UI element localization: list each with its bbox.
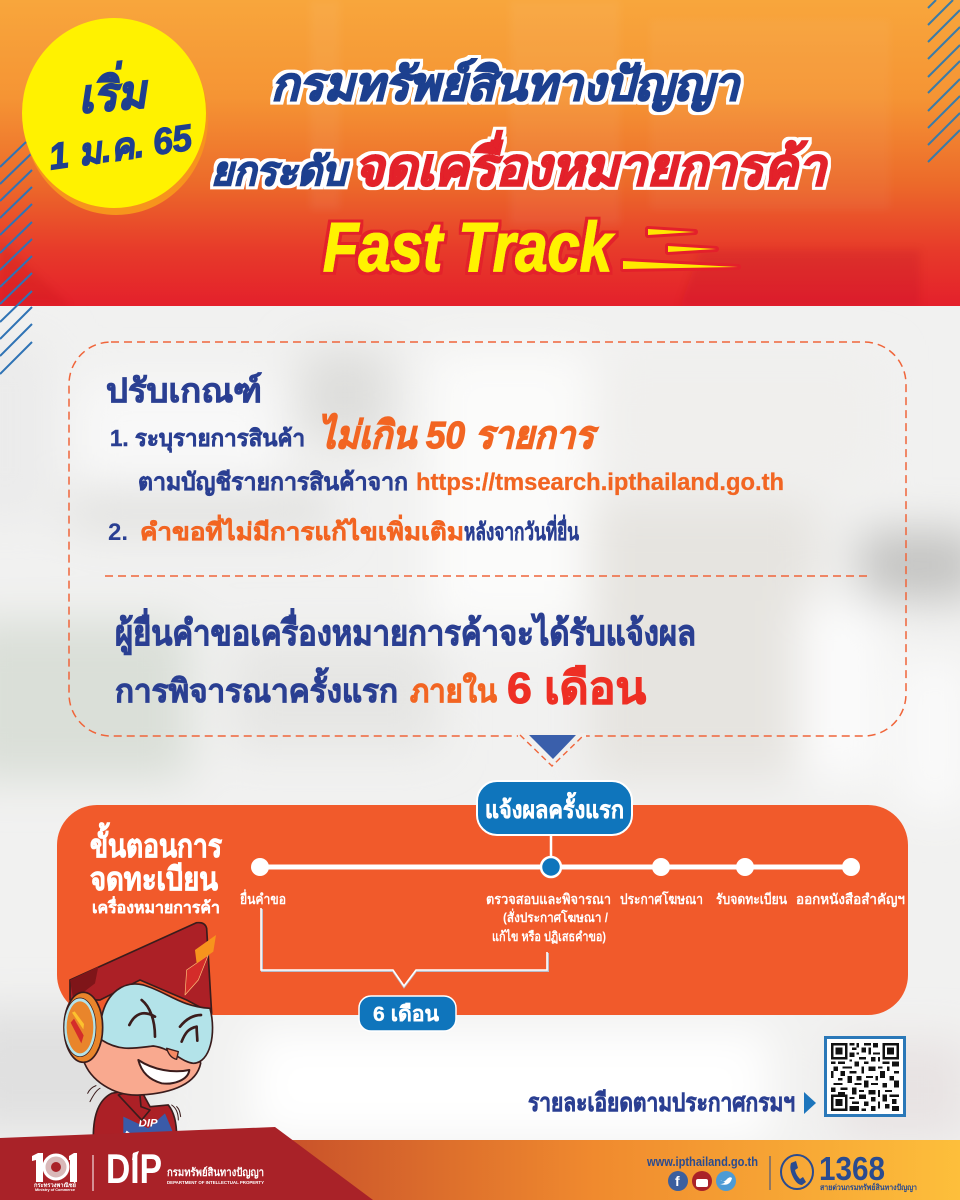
header band — [0, 0, 960, 306]
arrow: down triangle — [518, 733, 586, 766]
bracket: 6-month span — [261, 908, 548, 987]
criterion 1 — [110, 413, 784, 496]
footer band — [0, 1140, 960, 1200]
logo: DIP — [106, 1145, 264, 1192]
hat — [70, 923, 212, 1013]
mascot — [64, 923, 216, 1137]
contact: hotline 1368: สายด่วนกรมทรัพย์สินทางปัญญา — [820, 1182, 917, 1193]
panel: criteria — [69, 342, 906, 736]
callout: first notification: แจ้งผลครั้งแรก — [485, 791, 624, 824]
criterion 2: หลังจากวันที่ยื่น — [464, 514, 579, 546]
icon: speed lines — [623, 229, 738, 269]
heading: criteria: ปรับเกณฑ์ — [106, 372, 262, 409]
heading: steps: เครื่องหมายการค้า — [92, 896, 220, 917]
badge: start date: 1 ม.ค. 65 — [46, 117, 196, 178]
title line 1: กรมทรัพย์สินทางปัญญา — [271, 58, 741, 112]
goggle visor — [102, 984, 213, 1063]
panel: registration steps — [57, 805, 908, 1015]
notification text: ภายใน — [410, 672, 497, 709]
notification text: ผู้ยื่นคำขอเครื่องหมายการค้าจะได้รับแจ้งผล — [115, 608, 696, 655]
criterion 2: คำขอที่ไม่มีการแก้ไขเพิ่มเติม — [140, 514, 464, 546]
heading: steps: จดทะเบียน — [90, 861, 218, 897]
heading: steps: ขั้นตอนการ — [90, 822, 222, 864]
step labels: (สั่งประกาศโฆษณา / — [503, 908, 608, 925]
notification text: 6 เดือน — [507, 664, 646, 713]
ear disc — [64, 992, 103, 1062]
step labels — [240, 889, 905, 945]
step labels: ประกาศโฆษณา — [620, 890, 703, 907]
icon: phone — [781, 1155, 813, 1189]
logo: DIP: กรมทรัพย์สินทางปัญญา — [167, 1166, 264, 1179]
background: blurred office — [0, 306, 960, 1146]
callout: six months: 6 เดือน — [373, 1002, 440, 1026]
contact: website and social — [646, 1155, 758, 1191]
logo: ministry of commerce: Ministry of Commerce — [35, 1187, 76, 1192]
icon: facebook: f — [675, 1173, 680, 1189]
title line 2: จดเครื่องหมายการค้า — [354, 130, 829, 197]
logo: ministry of commerce — [32, 1153, 77, 1192]
icon: twitter — [716, 1171, 736, 1191]
criterion 2: 2. — [108, 519, 128, 546]
notification text: การพิจารณาครั้งแรก — [115, 667, 398, 709]
step labels: รับจดทะเบียน — [716, 891, 787, 907]
QR code — [826, 1038, 904, 1116]
details note: รายละเอียดตามประกาศกรมฯ — [528, 1089, 795, 1117]
logo: DIP: DEPARTMENT OF INTELLECTUAL PROPERTY — [167, 1180, 264, 1185]
mouth — [138, 1060, 189, 1084]
contact: hotline 1368 — [781, 1150, 917, 1193]
badge: start date: เริ่ม — [75, 58, 152, 123]
step labels: แก้ไข หรือ ปฏิเสธคำขอ) — [492, 928, 606, 945]
logo: DIP: DIP — [106, 1145, 162, 1192]
step labels: ออกหนังสือสำคัญฯ — [796, 891, 905, 908]
motion marks — [88, 1086, 181, 1120]
mascot: DIP — [139, 1118, 158, 1130]
contact: hotline 1368: 1368 — [819, 1150, 885, 1187]
criterion 1: ไม่เกิน 50 รายการ — [318, 413, 599, 457]
footer: red logo panel — [0, 1127, 373, 1200]
contact: website and social: www.ipthailand.go.th — [646, 1155, 758, 1169]
icon: youtube — [692, 1171, 712, 1191]
title line 2 — [211, 130, 829, 197]
timeline — [251, 830, 860, 877]
criterion 1: 1. ระบุรายการสินค้า — [110, 425, 305, 453]
decorative stripes: left — [0, 142, 32, 374]
criterion 2 — [108, 514, 579, 546]
heading: steps — [90, 822, 222, 917]
criterion 1: https://tmsearch.ipthailand.go.th — [416, 469, 784, 496]
callout: six months — [359, 996, 456, 1031]
callout: first notification — [477, 781, 632, 835]
notification text — [115, 608, 696, 713]
eyes — [129, 1000, 201, 1042]
step labels: ตรวจสอบและพิจารณา — [486, 891, 611, 907]
title line 2: ยกระดับ — [211, 150, 349, 194]
logo: ministry of commerce: กระทรวงพาณิชย์ — [34, 1181, 76, 1189]
badge: start date — [22, 18, 208, 215]
icon: arrow to QR — [804, 1092, 816, 1114]
title: Fast Track: Fast Track — [323, 208, 615, 286]
criterion 1: ตามบัญชีรายการสินค้าจาก — [138, 469, 408, 496]
head — [83, 1030, 201, 1095]
nose — [167, 1048, 178, 1059]
step labels: ยื่นคำขอ — [240, 889, 286, 907]
decorative stripes: top right — [928, 0, 960, 162]
body — [93, 1088, 177, 1137]
